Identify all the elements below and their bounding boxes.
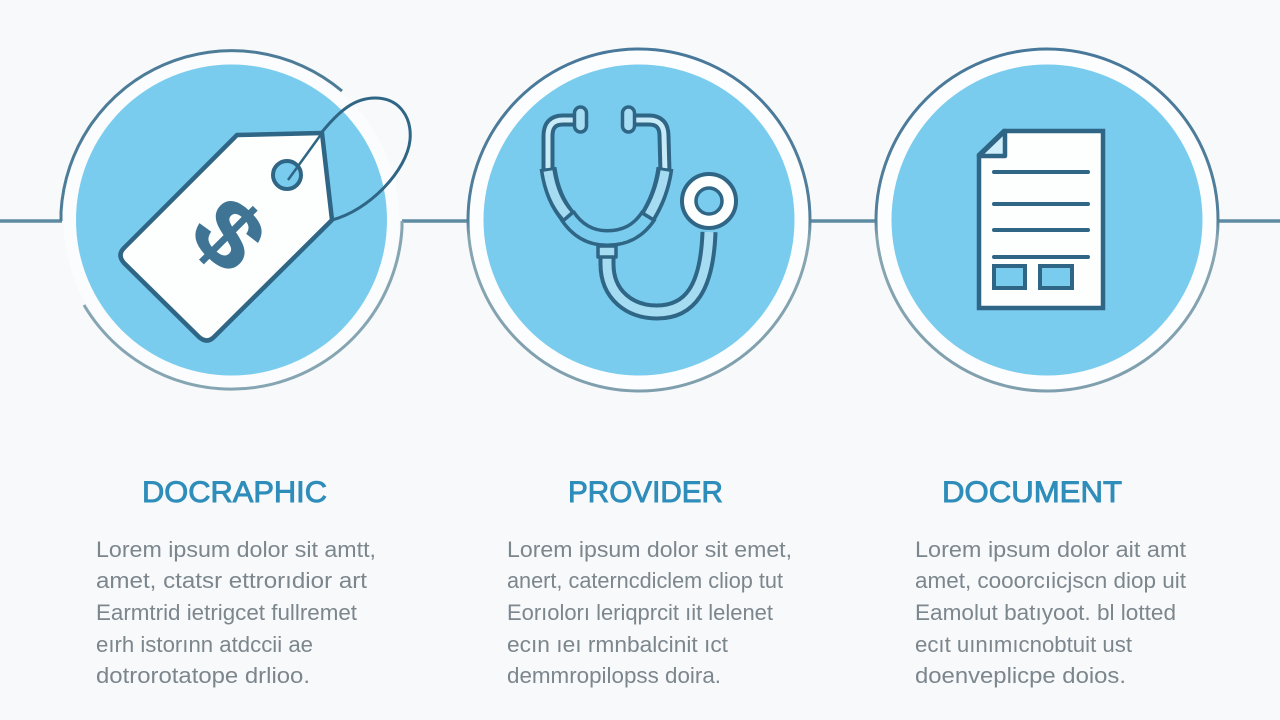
text block: document description: Eamolut batıyoot. bl lotted <box>915 600 1176 625</box>
panel: stethoscope circle <box>468 49 810 391</box>
text block: document description: amet, cooorcıicjscn diop uit <box>915 568 1186 593</box>
text block: docraphic description: Lorem ipsum dolor sit amtt, <box>96 537 376 562</box>
text block: docraphic description: Earmtrid ietrigcet fullremet <box>96 600 357 625</box>
text block: provider description: ecın ıeı rmnbalcinit ıct <box>507 632 728 657</box>
text block: provider description: anert, caterncdiclem cliop tut <box>507 568 783 593</box>
icon: price tag: $ <box>171 177 286 292</box>
text block: docraphic description <box>96 537 376 688</box>
text block: document description: doenveplicpe doios. <box>915 663 1126 688</box>
text block: docraphic description: dotrorotatope drlioo. <box>96 663 310 688</box>
text block: provider description: demmropilopss doira. <box>507 663 721 688</box>
heading: docraphic: DOCRAPHIC <box>142 476 327 509</box>
text block: provider description: Eorıolorı leriqprcit ıit lelenet <box>507 600 773 625</box>
text block: docraphic description: amet, ctatsr ettrorıdior art <box>96 568 367 593</box>
connector line: between first and second circle <box>402 219 469 223</box>
panel: document circle <box>876 49 1218 391</box>
text block: provider description: Lorem ipsum dolor sit emet, <box>507 537 792 562</box>
icon: document <box>979 131 1103 308</box>
heading: provider: PROVIDER <box>568 476 723 509</box>
text block: docraphic description: eırh istorınn atdccii ae <box>96 632 313 657</box>
text block: document description: ecıt uınımıcnobtuit ust <box>915 632 1132 657</box>
connector line: between second and third circle <box>810 219 877 223</box>
text block: provider description <box>507 537 792 688</box>
icon: price tag <box>120 98 410 340</box>
panel: price tag circle <box>61 51 410 389</box>
text block: document description <box>915 537 1186 688</box>
text block: document description: Lorem ipsum dolor ait amt <box>915 537 1186 562</box>
connector line: right <box>1218 219 1280 223</box>
connector line: left <box>0 219 62 223</box>
icon: stethoscope <box>548 107 736 312</box>
heading: document: DOCUMENT <box>942 476 1122 509</box>
